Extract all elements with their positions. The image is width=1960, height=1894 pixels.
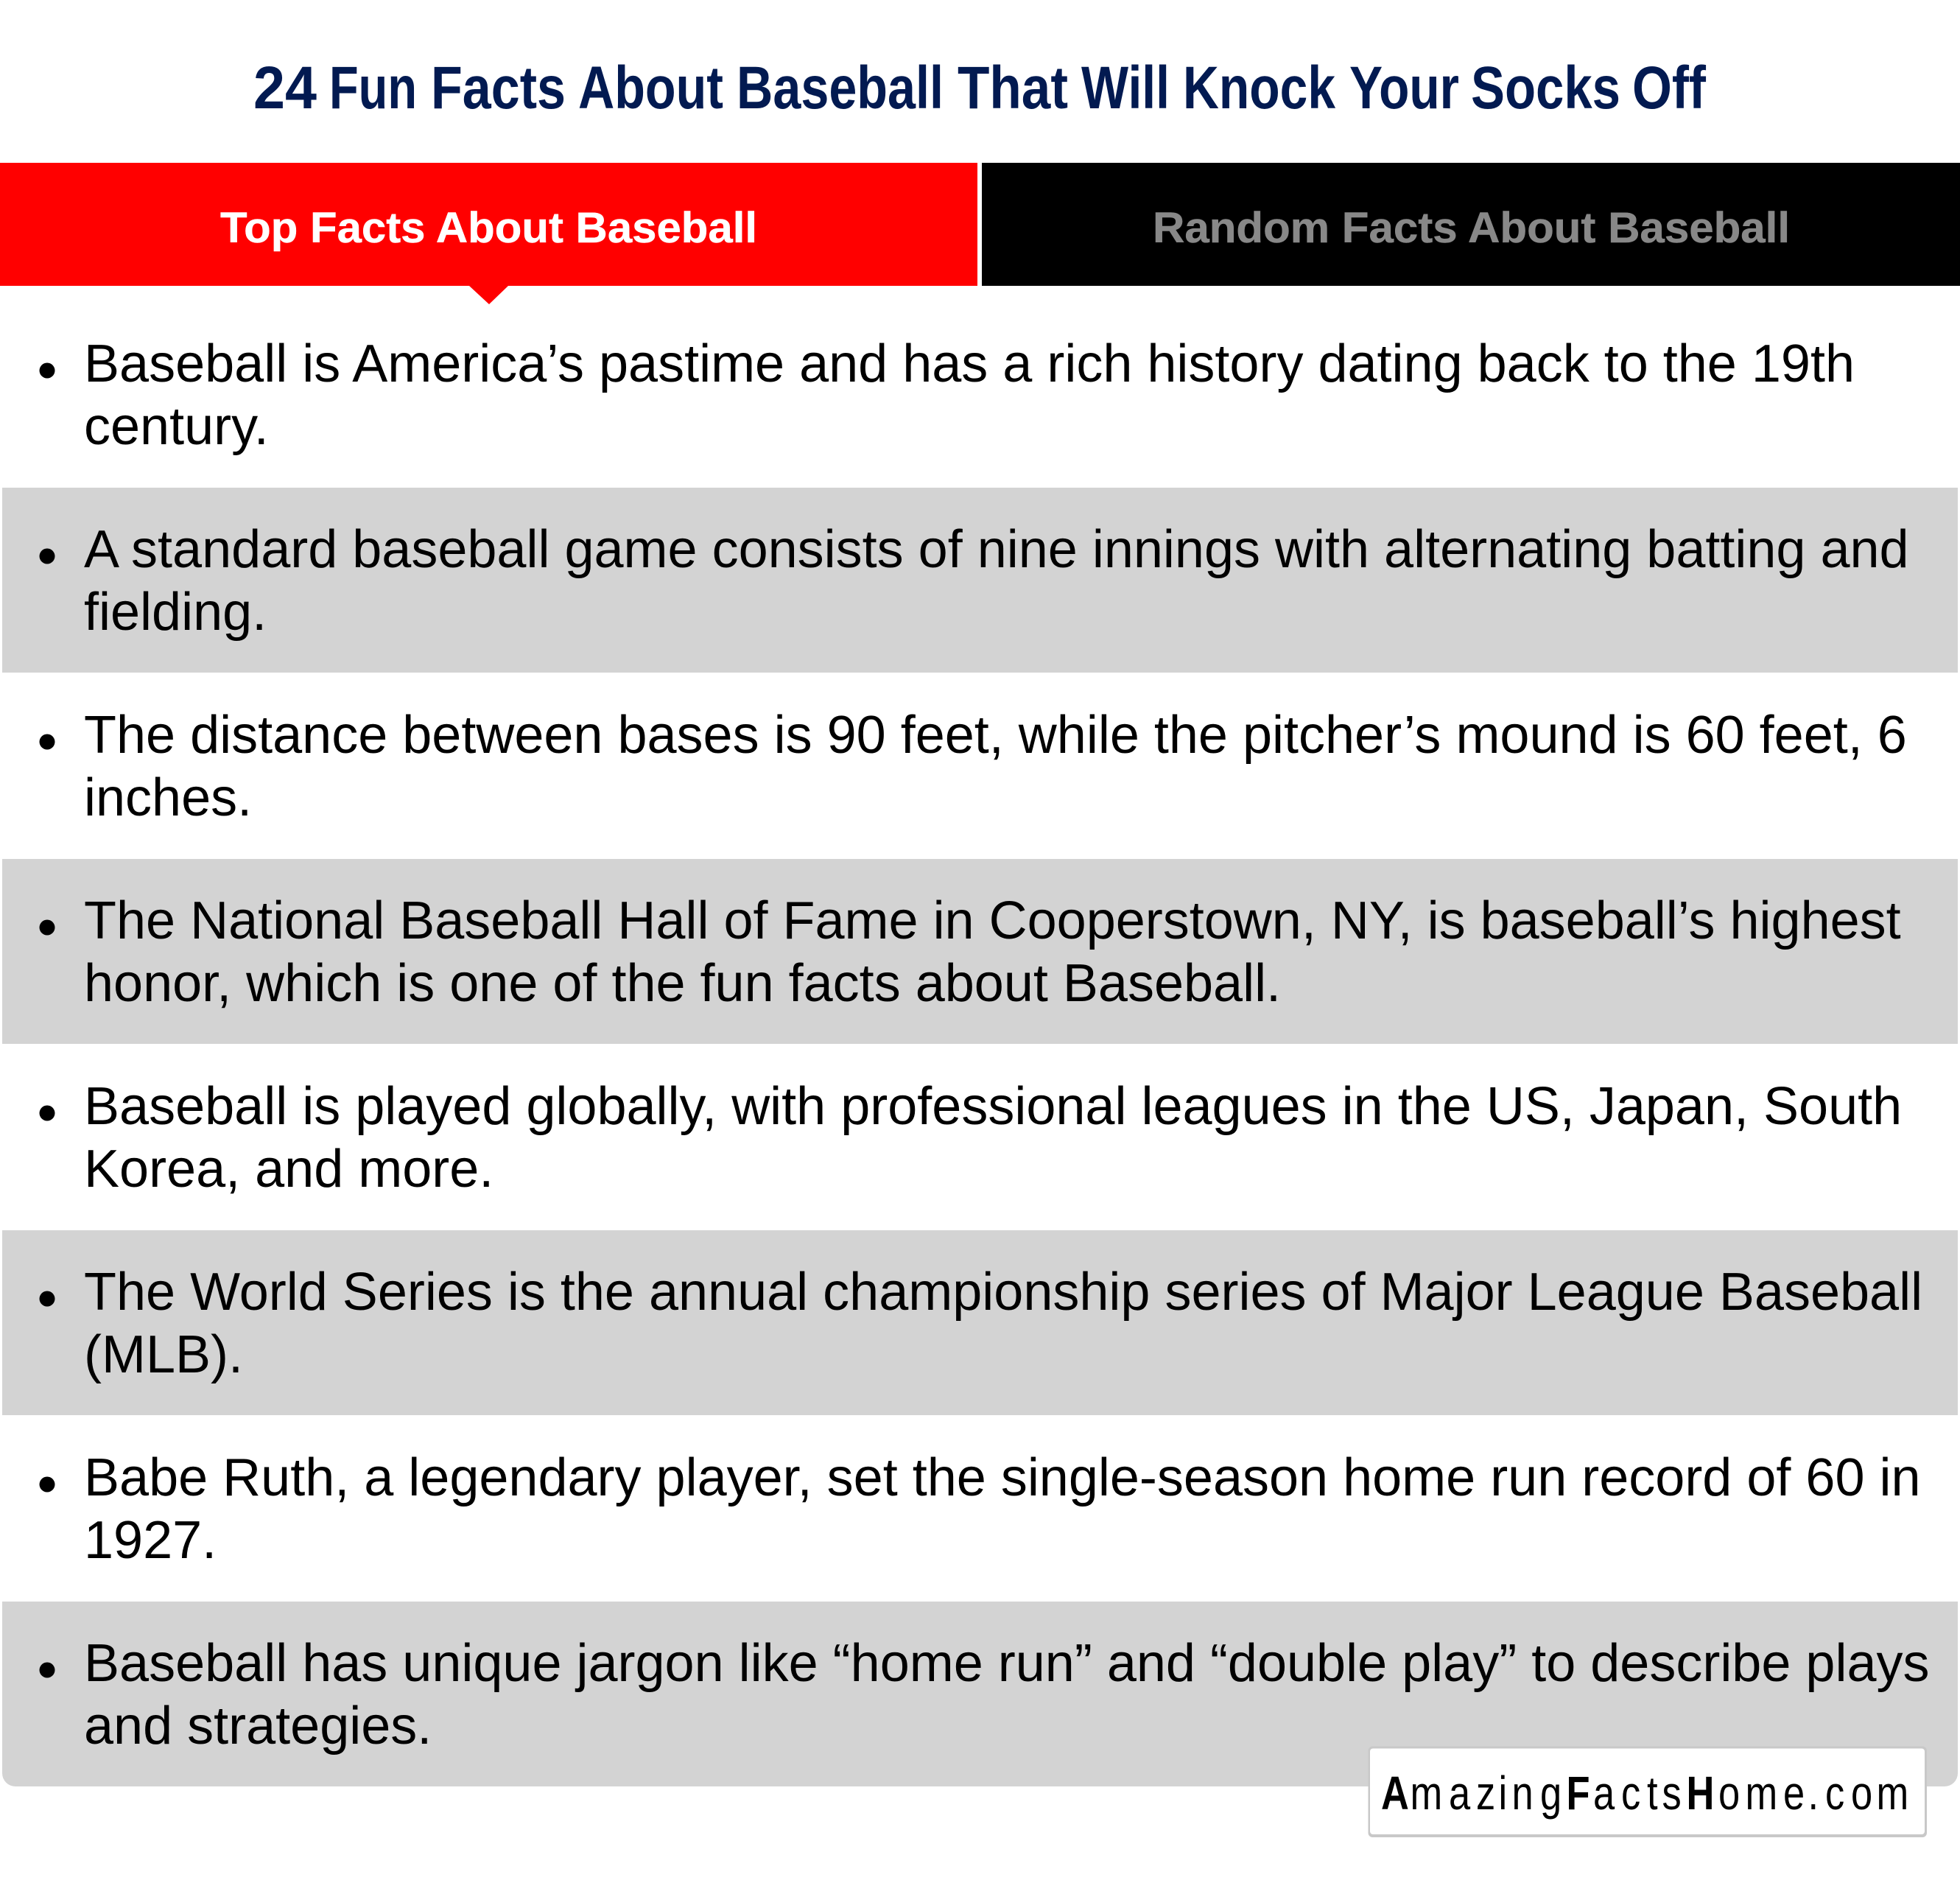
fact row 1: century.: [84, 397, 269, 456]
fact row 8: [2, 1602, 1958, 1786]
badge: AmazingFactsHome.com: F: [1567, 1767, 1590, 1820]
title: Will: [1081, 55, 1170, 122]
badge: AmazingFactsHome.com: [1369, 1746, 1927, 1837]
title: Knock: [1183, 55, 1335, 122]
fact row 3: [40, 706, 1907, 827]
fact row 2: [2, 488, 1958, 673]
fact row 7: Babe Ruth, a legendary player, set the single-season home run record of 60 in: [84, 1448, 1921, 1507]
title: Facts: [431, 55, 566, 122]
fact row 5: [40, 1077, 1902, 1199]
fact row 1: [40, 334, 1855, 456]
fact row 4: The National Baseball Hall of Fame in Cooperstown, NY, is baseball’s highest: [84, 891, 1901, 950]
badge: AmazingFactsHome.com: ome.com: [1718, 1767, 1908, 1820]
title: That: [958, 55, 1068, 122]
title: Fun: [329, 55, 417, 122]
badge: AmazingFactsHome.com: acts: [1593, 1767, 1682, 1820]
fact row 5: Korea, and more.: [84, 1140, 493, 1199]
title: Your: [1349, 55, 1459, 122]
fact row 2: A standard baseball game consists of nine innings with alternating batting and: [84, 520, 1909, 579]
fact row 3: The distance between bases is 90 feet, while the pitcher’s mound is 60 feet, 6: [84, 706, 1907, 765]
fact row 8: and strategies.: [84, 1697, 432, 1756]
fact row 7: [40, 1448, 1921, 1570]
badge: AmazingFactsHome.com: A: [1381, 1767, 1409, 1820]
title: 24: [253, 55, 317, 122]
badge: AmazingFactsHome.com: H: [1687, 1767, 1714, 1820]
fact row 4: [2, 859, 1958, 1044]
title: About: [578, 55, 723, 122]
fact row 3: inches.: [84, 768, 252, 827]
title: Off: [1632, 55, 1707, 122]
fact row 1: Baseball is America’s pastime and has a rich history dating back to the 19th: [84, 334, 1855, 393]
title: [253, 55, 1707, 122]
fact row 2: fielding.: [84, 583, 267, 642]
fact row 8: Baseball has unique jargon like “home run” and “double play” to describe plays: [84, 1634, 1929, 1693]
fact row 5: Baseball is played globally, with professional leagues in the US, Japan, South: [84, 1077, 1902, 1136]
fact row 6: The World Series is the annual championship series of Major League Baseball: [84, 1263, 1922, 1322]
tab: top facts (active): Top Facts About Baseball: [220, 204, 757, 252]
fact row 6: (MLB).: [84, 1325, 243, 1384]
fact row 7: 1927.: [84, 1511, 217, 1570]
fact row 4: honor, which is one of the fun facts about Baseball.: [84, 954, 1281, 1013]
fact row 6: [2, 1230, 1958, 1415]
tab: random facts: [982, 163, 1960, 286]
title: Baseball: [737, 55, 944, 122]
title: Socks: [1471, 55, 1620, 122]
tab: top facts (active): [0, 163, 977, 304]
tab: random facts: Random Facts About Baseball: [1153, 204, 1790, 252]
badge: AmazingFactsHome.com: mazing: [1411, 1767, 1562, 1820]
